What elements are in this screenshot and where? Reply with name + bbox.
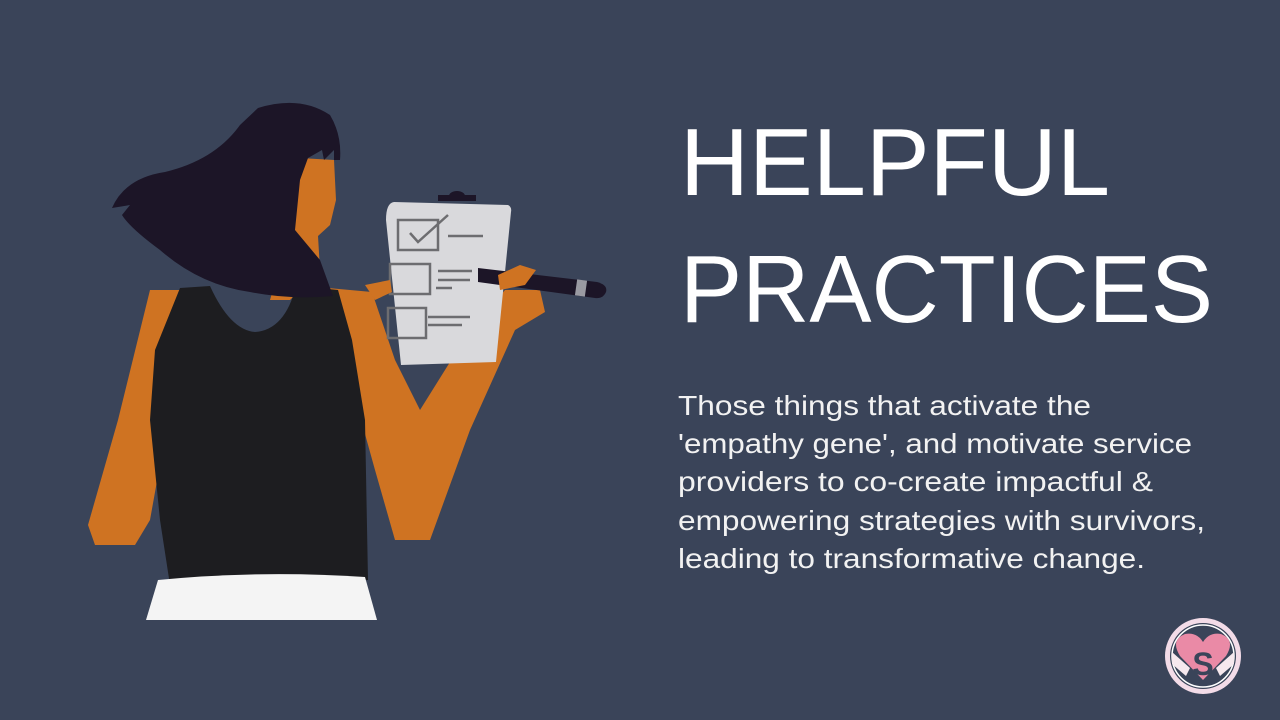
hands [365, 280, 392, 300]
title [680, 109, 1213, 343]
tank top [150, 286, 368, 585]
face and neck [270, 158, 336, 300]
left arm [88, 290, 185, 545]
right arm [328, 288, 545, 540]
body text: providers to co-create impactful & [678, 466, 1153, 497]
pen [478, 268, 606, 298]
body text: empowering strategies with survivors, [678, 505, 1205, 536]
logo: S [1192, 646, 1214, 682]
title: HELPFUL [680, 109, 1110, 216]
logo [1165, 618, 1241, 694]
body text: 'empathy gene', and motivate service [678, 428, 1192, 459]
clipboard [386, 191, 511, 365]
white skirt [146, 574, 377, 620]
title: PRACTICES [680, 236, 1213, 343]
body text [678, 390, 1205, 574]
body text: Those things that activate the [678, 390, 1091, 421]
hair [112, 103, 340, 297]
illustration: woman with clipboard [88, 103, 606, 620]
body text: leading to transformative change. [678, 543, 1145, 574]
